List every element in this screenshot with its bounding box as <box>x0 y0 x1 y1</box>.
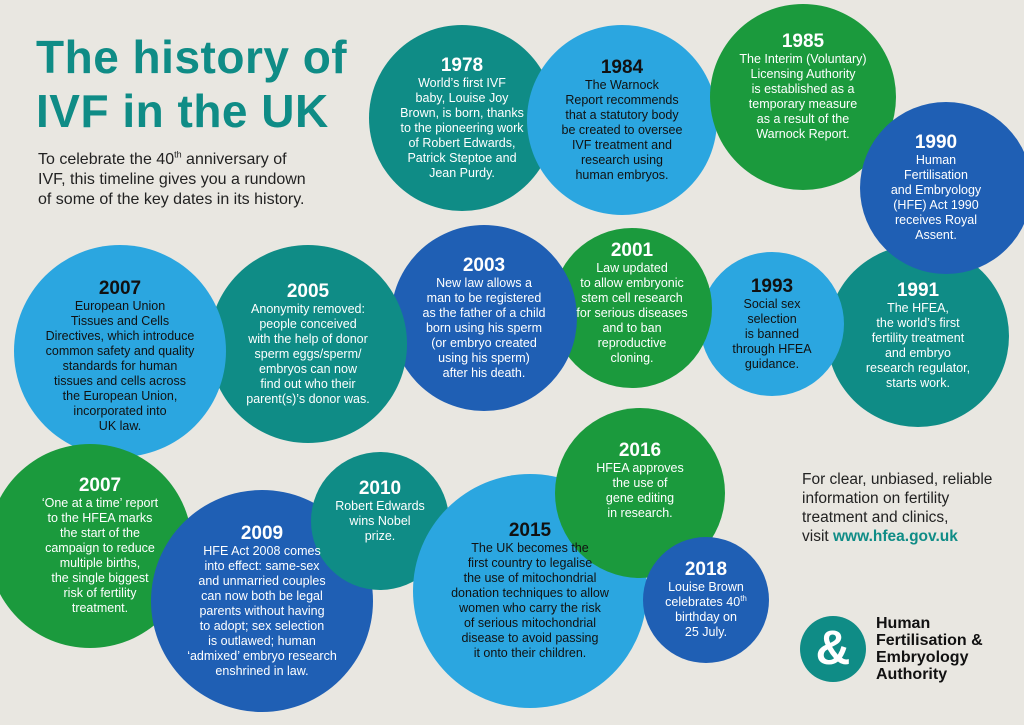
info text: visit www.hfea.gov.uk <box>802 528 958 545</box>
circle 1993: is banned <box>745 326 799 340</box>
circle 2007 <box>14 245 226 457</box>
circle 1991: starts work. <box>886 376 950 390</box>
icon: ampersand: & <box>816 622 850 675</box>
circle 2005: embryos can now <box>259 362 357 376</box>
circle 1984: Report recommends <box>565 92 679 106</box>
title: IVF in the UK <box>36 85 329 137</box>
circle 1984: research using <box>581 152 663 166</box>
circle 1991: fertility treatment <box>872 331 964 345</box>
circle 1991 <box>827 245 1009 427</box>
circle 2001: to allow embryonic <box>580 276 684 290</box>
circle 2009: 2009 <box>241 522 283 544</box>
circle 2003: using his sperm) <box>438 350 530 364</box>
title <box>36 31 347 137</box>
circle 1978 <box>369 25 555 211</box>
circle 1993: 1993 <box>751 276 793 296</box>
circle 1985: is established as a <box>752 82 854 96</box>
circle 2005: sperm eggs/sperm/ <box>254 346 361 360</box>
intro text <box>38 150 306 208</box>
circle 2009: HFE Act 2008 comes <box>203 544 321 558</box>
circle 2001: Law updated <box>596 260 668 274</box>
circle 2018: 2018 <box>685 559 727 580</box>
circle 2016: HFEA approves <box>596 460 684 474</box>
circle 2001: 2001 <box>611 240 653 260</box>
circle 1985: Licensing Authority <box>751 67 855 81</box>
circle 2015 <box>413 474 647 708</box>
circle 2007 one at a time: the single biggest <box>51 571 149 585</box>
circle 1991: and embryo <box>885 346 951 360</box>
info text: information on fertility <box>802 490 949 507</box>
title: The history of <box>36 31 347 83</box>
circle 1990: Human <box>916 153 956 167</box>
circle 2016: gene editing <box>606 490 674 504</box>
circle 1985: The Interim (Voluntary) <box>739 52 867 66</box>
circle 2009: into effect: same-sex <box>204 558 320 572</box>
circle 2005 <box>209 245 407 443</box>
circle 2010: prize. <box>365 528 395 542</box>
circle 2007: European Union <box>75 298 165 312</box>
circle 2001: and to ban <box>602 320 662 334</box>
circle 2018: celebrates 40th <box>665 594 747 609</box>
circle 2007 one at a time: ‘One at a time’ report <box>42 496 158 510</box>
circle 2015: of serious mitochondrial <box>464 616 596 630</box>
circle 1990: and Embryology <box>891 183 981 197</box>
circle 1984: IVF treatment and <box>572 138 672 152</box>
circle 2007: common safety and quality <box>46 344 194 358</box>
circle 1978: Patrick Steptoe and <box>407 150 517 164</box>
circle 2001: stem cell research <box>581 290 683 304</box>
intro text: IVF, this timeline gives you a rundown <box>38 171 306 188</box>
circle 2015: The UK becomes the <box>471 541 589 555</box>
circle 2007 one at a time: campaign to reduce <box>45 541 155 555</box>
circle 1984: 1984 <box>601 56 643 78</box>
circle 2007 one at a time: 2007 <box>79 475 121 496</box>
circle 2009: to adopt; sex selection <box>200 618 324 632</box>
circle 2018 <box>643 537 769 663</box>
circle 2015: disease to avoid passing <box>462 631 598 645</box>
circle 1993 <box>700 252 844 396</box>
circle 2016: the use of <box>613 476 667 490</box>
circle 1985: as a result of the <box>757 112 849 126</box>
circle 2016: 2016 <box>619 440 661 460</box>
circle 2007 one at a time: to the HFEA marks <box>48 511 152 525</box>
logo text: Fertilisation & <box>876 632 983 649</box>
circle 2015: women who carry the risk <box>459 601 601 615</box>
circle 2007 one at a time: the start of the <box>60 526 140 540</box>
intro text: To celebrate the 40th anniversary of <box>38 150 287 168</box>
circle 2015: it onto their children. <box>474 646 586 660</box>
circle 2016 <box>555 408 725 578</box>
circle 2015: 2015 <box>509 520 551 541</box>
circle 1990: 1990 <box>915 132 957 153</box>
circle 1984: human embryos. <box>575 168 669 182</box>
circle 1978: Jean Purdy. <box>429 166 495 180</box>
circle 1990: (HFE) Act 1990 <box>893 198 979 212</box>
info text: For clear, unbiased, reliable <box>802 471 992 488</box>
circle 2005: people conceived <box>259 316 357 330</box>
circle 2015: donation techniques to allow <box>451 586 609 600</box>
circle 2003: 2003 <box>463 254 505 276</box>
circle 2005: parent(s)’s donor was. <box>246 392 370 406</box>
circle 2010: Robert Edwards <box>335 498 425 512</box>
circle 1993: through HFEA <box>732 342 812 356</box>
circle 1985 <box>710 4 896 190</box>
circle 2005: Anonymity removed: <box>251 302 365 316</box>
circle 1985: 1985 <box>782 31 824 52</box>
logo text: Authority <box>876 666 947 683</box>
circle 2009: is outlawed; human <box>208 634 316 648</box>
circle 2009 <box>151 490 373 712</box>
logo text <box>876 615 983 683</box>
circle 1993: guidance. <box>745 356 799 370</box>
circle 2010: 2010 <box>359 478 401 498</box>
circle 2003: after his death. <box>443 366 525 380</box>
circle 1978: World’s first IVF <box>418 76 506 90</box>
circle 2015: first country to legalise <box>468 556 592 570</box>
icon: ampersand <box>800 616 866 682</box>
circle 2009: enshrined in law. <box>215 664 309 678</box>
circle 2001: for serious diseases <box>576 306 688 320</box>
circle 1978: baby, Louise Joy <box>416 90 508 104</box>
circle 1984: that a statutory body <box>565 108 679 122</box>
circle 2007: Directives, which introduce <box>46 328 194 342</box>
circle 1990 <box>860 102 1024 274</box>
circle 2005: find out who their <box>260 376 356 390</box>
circle 2010 <box>311 452 449 590</box>
circle 1978: of Robert Edwards, <box>408 136 515 150</box>
logo <box>800 615 983 683</box>
circle 1985: temporary measure <box>749 97 857 111</box>
circle 2001 <box>552 228 712 388</box>
circle 1984: The Warnock <box>585 78 659 92</box>
info text: treatment and clinics, <box>802 509 948 526</box>
circle 1978: 1978 <box>441 54 483 76</box>
circle 1984 <box>527 25 717 215</box>
circle 2010: wins Nobel <box>349 514 411 528</box>
circle 2007: 2007 <box>99 278 141 298</box>
circle 1990: Fertilisation <box>904 168 968 182</box>
circle 2009: can now both be legal <box>201 588 323 602</box>
circle 2007 one at a time: multiple births, <box>60 556 140 570</box>
intro text: of some of the key dates in its history. <box>38 191 304 208</box>
circle 2015: the use of mitochondrial <box>464 571 596 585</box>
circle 2001: reproductive <box>598 336 666 350</box>
logo text: Human <box>876 615 930 632</box>
circle 1984: be created to oversee <box>562 122 682 136</box>
circle 2007: incorporated into <box>73 404 167 418</box>
circle 2003: born using his sperm <box>426 320 542 334</box>
circle 1985: Warnock Report. <box>756 127 850 141</box>
circle 2007 one at a time: treatment. <box>72 601 128 615</box>
circle 2018: Louise Brown <box>668 580 744 594</box>
circle 2003: New law allows a <box>436 276 532 290</box>
circle 2018: birthday on <box>675 610 737 624</box>
circle 1991: 1991 <box>897 280 939 301</box>
circle 2005: with the help of donor <box>248 332 368 346</box>
circle 2003 <box>391 225 577 411</box>
circle 2003: man to be registered <box>427 290 541 304</box>
circle 1991: research regulator, <box>866 361 970 375</box>
circle 2005: 2005 <box>287 280 329 302</box>
circle 2007: UK law. <box>99 418 141 432</box>
circle 2003: (or embryo created <box>431 336 537 350</box>
circle 2001: cloning. <box>610 350 654 364</box>
circle 2009: and unmarried couples <box>198 574 326 588</box>
circle 2007: Tissues and Cells <box>71 314 169 328</box>
circle 1993: selection <box>747 312 797 326</box>
circle 2007 one at a time: risk of fertility <box>64 586 136 600</box>
circle 2003: as the father of a child <box>422 306 546 320</box>
circle 1991: the world’s first <box>876 316 960 330</box>
circle 1978: Brown, is born, thanks <box>400 106 524 120</box>
circle 1990: Assent. <box>915 228 957 242</box>
circle 2007: standards for human <box>63 358 177 372</box>
circle 1990: receives Royal <box>895 213 977 227</box>
circle 1993: Social sex <box>744 296 800 310</box>
circle 2007: tissues and cells across <box>54 374 186 388</box>
circle 1978: to the pioneering work <box>400 120 523 134</box>
circle 2009: ‘admixed’ embryo research <box>187 648 337 662</box>
circle 2018: 25 July. <box>685 625 727 639</box>
circle 2007: the European Union, <box>63 388 177 402</box>
circle 2009: parents without having <box>199 604 325 618</box>
circle 2007 one at a time <box>0 444 192 648</box>
circle 1991: The HFEA, <box>887 301 949 315</box>
circle 2016: in research. <box>607 506 673 520</box>
info text <box>802 471 992 545</box>
logo text: Embryology <box>876 649 968 666</box>
